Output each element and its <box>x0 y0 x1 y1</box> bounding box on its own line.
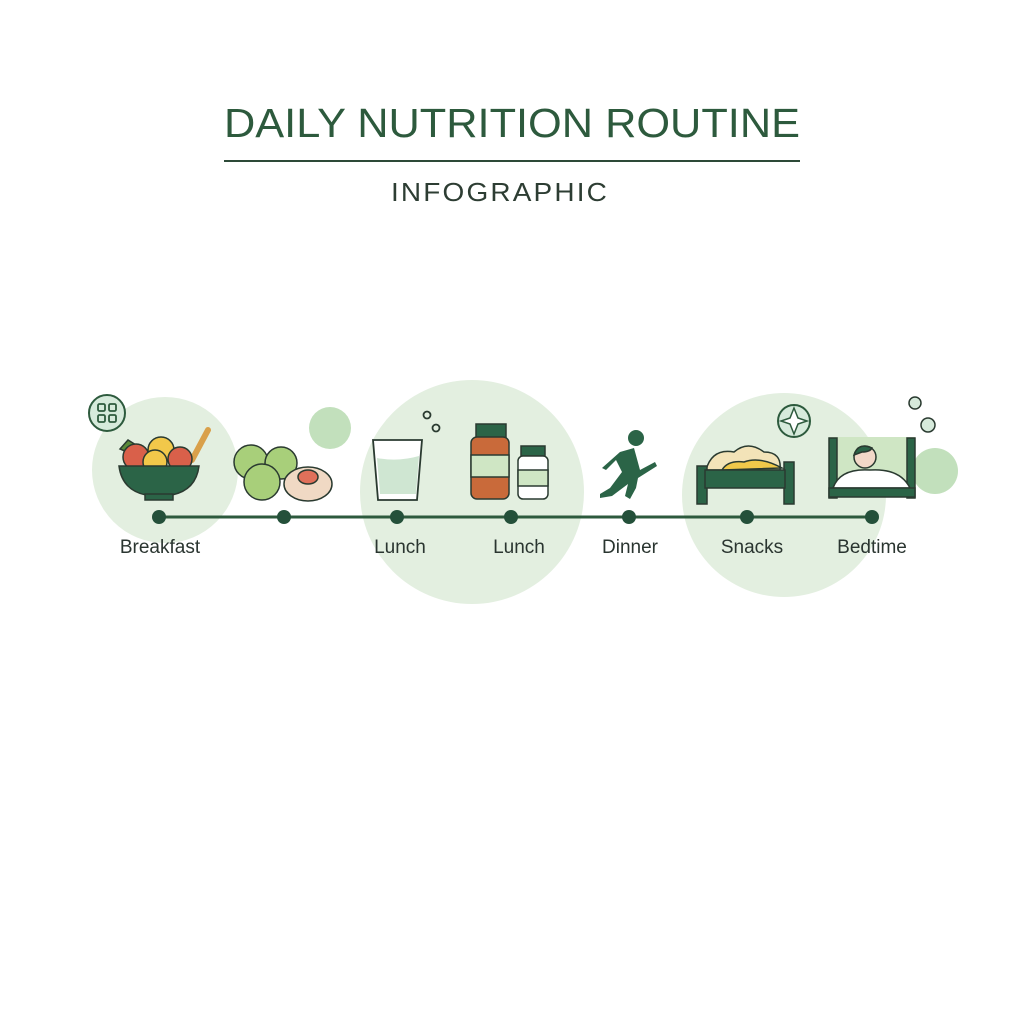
icon: fruit bowl <box>119 430 208 500</box>
timeline labels <box>120 537 907 558</box>
timeline labels: Bedtime <box>837 537 907 558</box>
background circles <box>92 380 958 604</box>
icon: sleeping person in bed <box>829 397 935 498</box>
icon: supplement bottles <box>471 424 548 499</box>
icon: sparkle badge <box>778 405 810 437</box>
subtitle: INFOGRAPHIC <box>391 177 609 207</box>
icon: cucumber slices <box>234 445 332 501</box>
title: DAILY NUTRITION ROUTINE <box>224 100 800 146</box>
timeline labels: Dinner <box>602 537 659 558</box>
timeline labels: Lunch <box>374 537 426 558</box>
icon: glass of water <box>373 412 440 500</box>
icon: bed with snacks <box>697 446 794 504</box>
timeline labels: Breakfast <box>120 537 201 558</box>
timeline labels: Lunch <box>493 537 545 558</box>
timeline <box>152 510 879 524</box>
icon: running person <box>600 430 657 499</box>
icon: grid badge <box>89 395 125 431</box>
timeline labels: Snacks <box>721 537 783 558</box>
